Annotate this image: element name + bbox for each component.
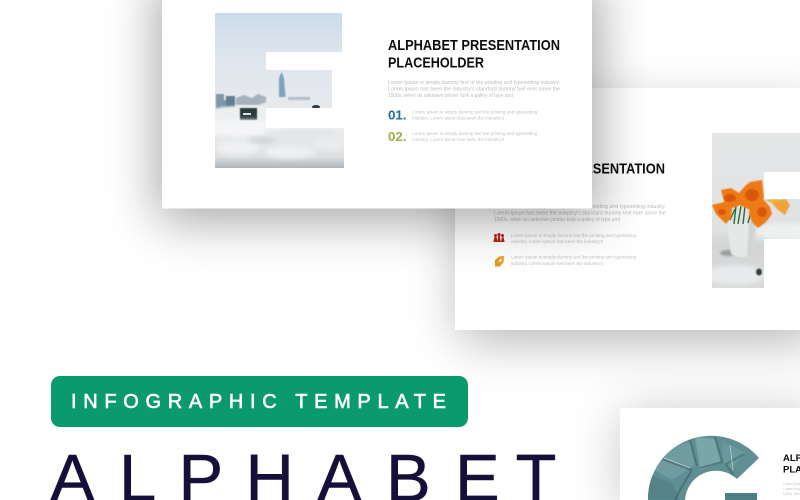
- panel: slide F: [455, 88, 800, 330]
- icon: red people: [494, 233, 504, 242]
- slide G paragraph: [783, 482, 800, 496]
- slide E heading: PLACEHOLDER: [388, 54, 484, 72]
- slide E heading: ALPHABET PRESENTATION: [388, 37, 560, 54]
- slide F heading: PLACEHOLDER: [493, 178, 589, 195]
- number 02: 02.: [388, 129, 406, 144]
- slide E list item 2: [412, 131, 538, 143]
- slide F list item 2: Lorem Ipsum is simply dummy text the printing and typesetting: [511, 255, 636, 261]
- slide E list item 1: [412, 109, 538, 121]
- slide F heading: ALPHABET PRESENTATION: [493, 160, 665, 178]
- number 01: 01.: [388, 108, 406, 122]
- letter G photo: teal succulent leaves: [648, 436, 759, 500]
- slide E paragraph: Lorem Ipsum is simply dummy text of the printing and typesetting industry.: [388, 80, 560, 86]
- panel: slide G: [620, 408, 800, 500]
- slide G heading: [783, 453, 800, 476]
- icon: orange hand: [495, 256, 504, 266]
- slide E paragraph: Lorem Ipsum has been the industry's standard dummy text ever since the: [388, 86, 560, 92]
- slide F list item 1: Lorem Ipsum is simply dummy text the printing and typesetting: [511, 233, 636, 239]
- slide F paragraph: [494, 204, 666, 223]
- badge: infographic template: INFOGRAPHIC TEMPLATE: [71, 391, 446, 413]
- slide E heading: [388, 37, 560, 72]
- slide F paragraph: Lorem Ipsum is simply dummy text of the printing and typesetting industry.: [494, 204, 666, 210]
- slide F heading: [493, 160, 665, 195]
- badge: infographic template: [51, 376, 468, 427]
- slide F paragraph: Lorem Ipsum has been the industry's standard dummy text ever since the: [494, 210, 666, 216]
- letter F photo: orange flowers in a white vase: [705, 133, 800, 289]
- letter E photo: city above clouds: [205, 13, 346, 168]
- panel: slide E: [162, 0, 592, 208]
- slide E list item 1: industry. Lorem Ipsum has been the industry's: [412, 115, 505, 121]
- slide E list item 2: Lorem Ipsum is simply dummy text the printing and typesetting: [412, 131, 538, 137]
- slide E paragraph: 1500s, when an unknown printer took a galley of type and: [388, 93, 513, 99]
- slide F list item 2: industry. Lorem Ipsum has been the industry's: [511, 261, 604, 267]
- slide F list item 2: [511, 255, 636, 267]
- slide E paragraph: [388, 80, 560, 99]
- slide F list item 1: [511, 233, 636, 245]
- slide E list item 2: industry. Lorem Ipsum has been the industry's: [412, 137, 505, 143]
- slide E list item 1: Lorem Ipsum is simply dummy text the printing and typesetting: [412, 109, 538, 115]
- slide F list item 1: industry. Lorem Ipsum has been the industry's: [511, 239, 604, 245]
- slide F paragraph: 1500s, when an unknown printer took a galley of type and: [494, 217, 620, 223]
